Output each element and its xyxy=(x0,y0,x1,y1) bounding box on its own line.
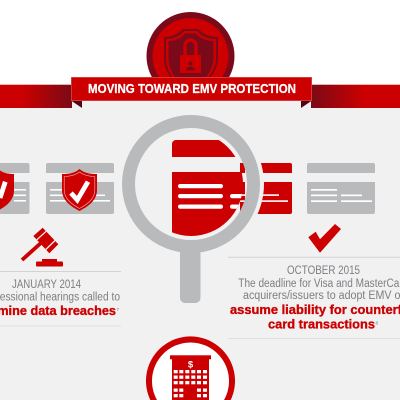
icon: magnifying glass xyxy=(128,122,254,303)
ribbon band right xyxy=(311,85,400,108)
card with shield, cropped left xyxy=(0,163,30,214)
text: October 2015 block: card transactions xyxy=(268,316,375,332)
background panel xyxy=(0,101,400,400)
icon: gavel xyxy=(22,228,63,266)
divider right top xyxy=(228,256,400,259)
text: January 2014 block xyxy=(0,279,120,318)
icon: bank building badge: $ xyxy=(188,360,194,370)
title banner: MOVING TOWARD EMV PROTECTION xyxy=(88,81,296,96)
card with shield xyxy=(46,163,114,214)
text: January 2014 block: 7 xyxy=(116,307,120,312)
divider left bottom xyxy=(0,324,121,327)
ribbon fold left xyxy=(71,101,82,108)
magnified red card xyxy=(172,140,243,236)
red card outside lens xyxy=(240,163,292,214)
title banner xyxy=(71,77,312,101)
text: October 2015 block: OCTOBER 2015 xyxy=(287,265,360,277)
icon: shield lock badge xyxy=(146,12,234,100)
ribbon fold right xyxy=(301,101,312,108)
divider left top xyxy=(0,270,121,273)
text: October 2015 block xyxy=(230,265,400,332)
icon: shield check xyxy=(62,169,97,211)
text: October 2015 block: 8 xyxy=(376,320,378,326)
ribbon band left xyxy=(0,85,72,108)
gray card right xyxy=(307,163,375,214)
icon: check mark xyxy=(308,224,341,253)
divider right bottom xyxy=(228,337,400,340)
text: January 2014 block: JANUARY 2014 xyxy=(12,279,82,291)
icon: bank building badge xyxy=(146,336,235,400)
